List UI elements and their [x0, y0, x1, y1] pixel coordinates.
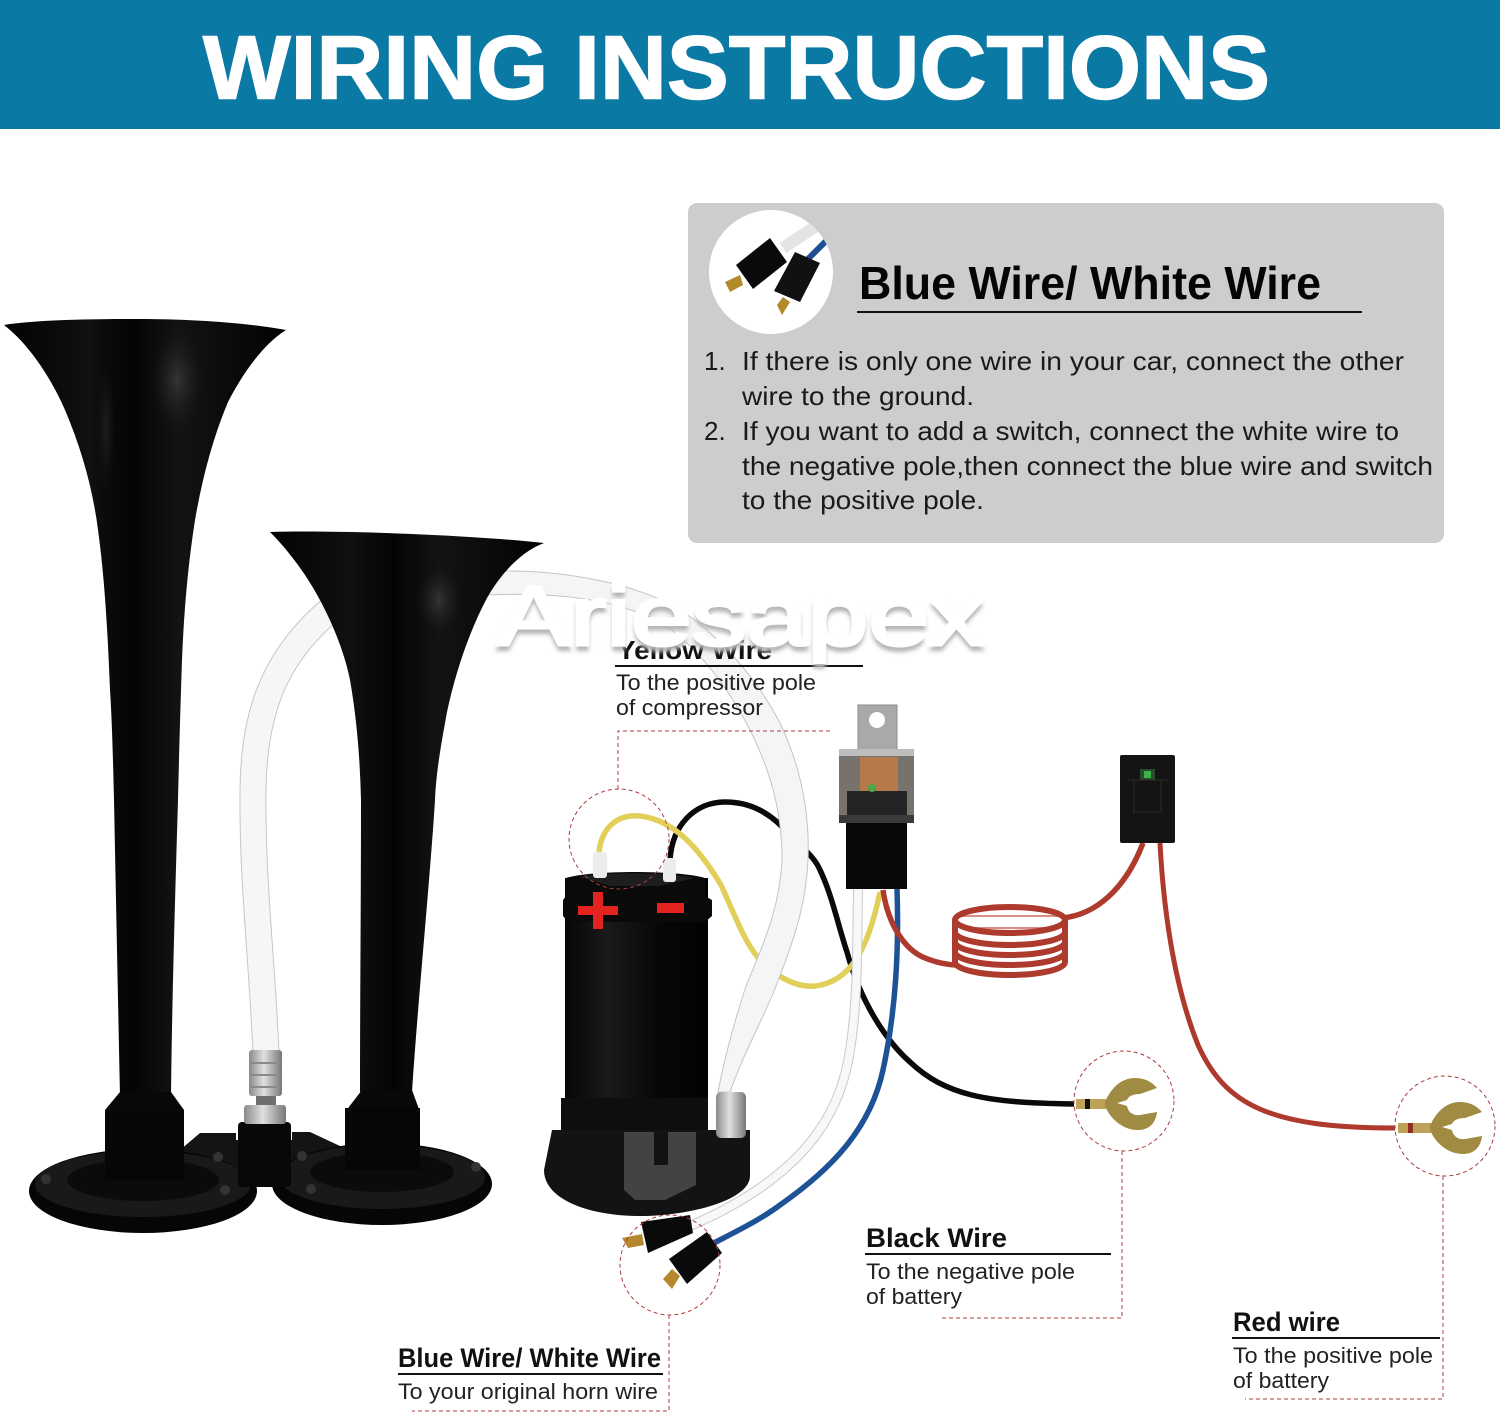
title: WIRING INSTRUCTIONS — [203, 18, 1270, 118]
horn mounting base — [29, 1050, 492, 1233]
watermark: Ariesapex — [497, 574, 984, 668]
instruction list: to the positive pole. — [742, 485, 984, 515]
fuse holder — [1120, 755, 1175, 843]
label: yellow wire: Yellow Wire — [617, 635, 772, 665]
callout: dashed leader circles and lines — [412, 731, 1495, 1411]
label: yellow wire: To the positive pole — [616, 670, 816, 695]
minus mark — [657, 903, 684, 913]
plug connector: white wire — [622, 1215, 693, 1253]
instruction list: 2. — [704, 416, 726, 446]
panel: blue wire / white wire instructions — [688, 203, 1444, 543]
fork terminal: black wire — [1076, 1078, 1157, 1130]
air hose: left section — [253, 598, 345, 1052]
instruction list — [704, 346, 1433, 515]
red wire with coil — [883, 843, 1143, 975]
fork terminal: red wire — [1398, 1102, 1482, 1154]
air hose: right section — [470, 571, 808, 1092]
label: black wire: Black Wire — [866, 1223, 1007, 1253]
yellow wire — [599, 816, 880, 986]
instruction list: wire to the ground. — [741, 381, 974, 411]
hose fitting — [244, 1050, 286, 1124]
black wire — [670, 802, 1074, 1104]
large horn — [4, 319, 286, 1182]
label: blue wire / white wire: Blue Wire/ White Wire — [398, 1343, 661, 1373]
label: blue wire / white wire — [398, 1343, 663, 1404]
watermark: Ariesapex — [497, 569, 984, 663]
plug connector: blue wire — [663, 1232, 722, 1289]
label: black wire: To the negative pole — [866, 1259, 1075, 1284]
small horn collar — [345, 1090, 420, 1172]
plus mark — [578, 892, 618, 929]
red wire to battery — [1160, 843, 1395, 1128]
compressor — [544, 852, 750, 1216]
instruction list: If you want to add a switch, connect the white wire to — [742, 416, 1399, 446]
panel heading: Blue Wire/ White Wire — [859, 257, 1321, 309]
label: red wire: To the positive pole — [1233, 1343, 1433, 1368]
large horn collar — [105, 1092, 184, 1182]
icon: plug connectors — [709, 210, 833, 334]
small horn — [270, 532, 544, 1172]
instruction list: the negative pole,then connect the blue wire and switch — [742, 451, 1433, 481]
relay — [839, 705, 914, 889]
label: red wire — [1232, 1307, 1440, 1393]
header banner — [0, 0, 1500, 129]
terminals — [593, 852, 676, 882]
label: black wire: of battery — [866, 1284, 963, 1309]
instruction list: If there is only one wire in your car, connect the other — [742, 346, 1404, 376]
label: black wire — [865, 1223, 1111, 1309]
blue wire — [712, 888, 898, 1244]
label: red wire: of battery — [1233, 1368, 1330, 1393]
label: red wire: Red wire — [1233, 1307, 1340, 1337]
label: yellow wire: of compressor — [616, 695, 764, 720]
label: blue wire / white wire: To your original horn wire — [398, 1379, 658, 1404]
label: yellow wire — [615, 635, 863, 720]
compressor outlet fitting — [716, 1092, 746, 1138]
white wire — [690, 888, 858, 1226]
instruction list: 1. — [704, 346, 726, 376]
